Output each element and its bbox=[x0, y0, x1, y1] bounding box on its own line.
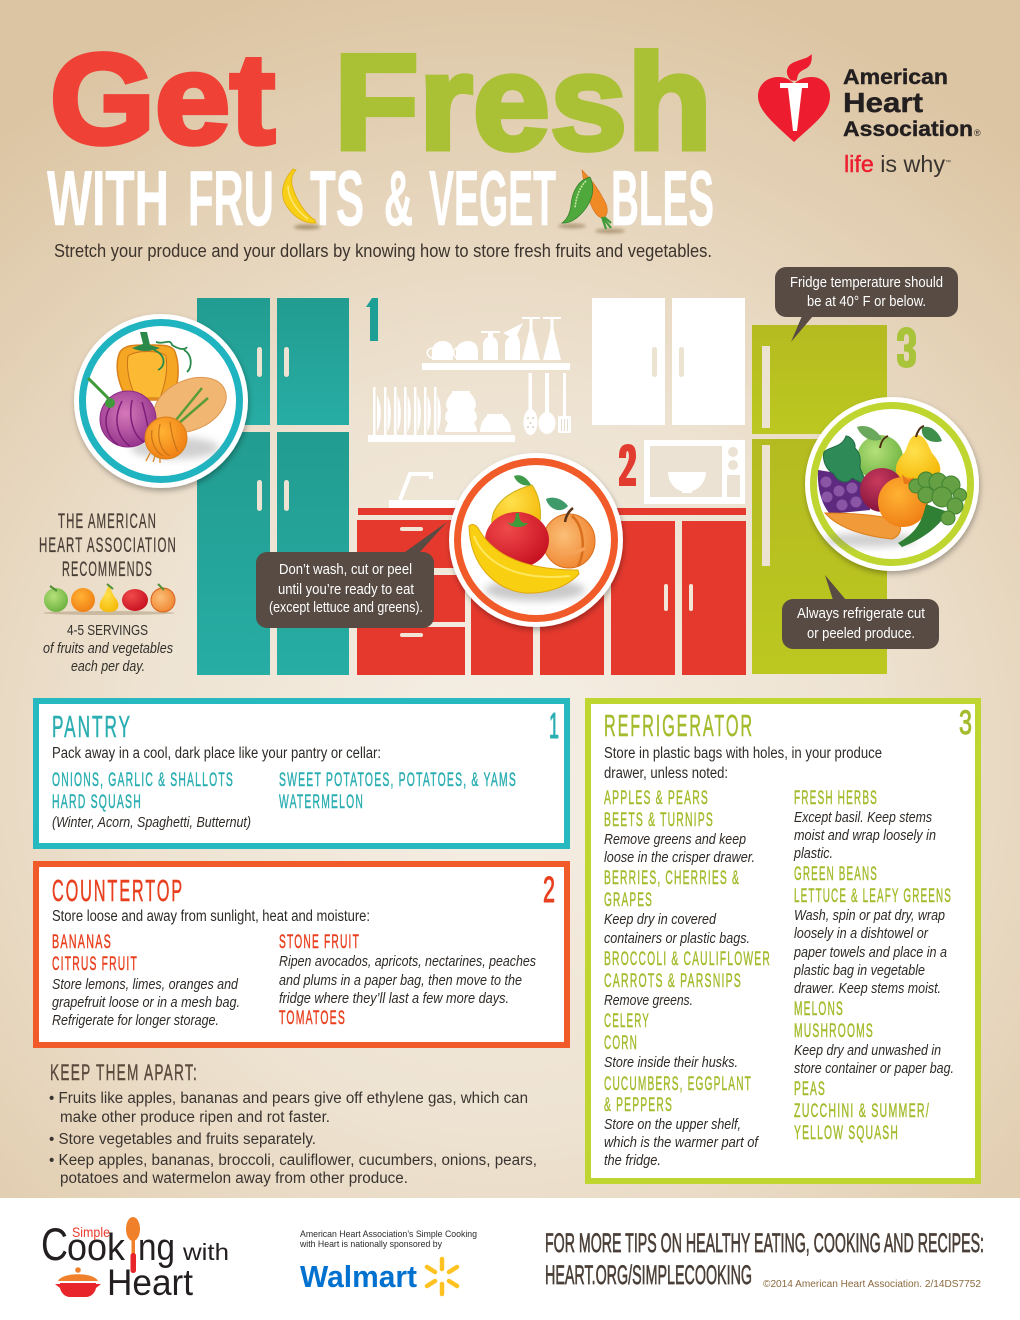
green apple bbox=[857, 426, 903, 481]
microwave bbox=[644, 440, 745, 504]
bullet list: potatoes and watermelon away from other produce. bbox=[60, 1170, 408, 1187]
icon: spark bbox=[427, 1259, 457, 1294]
right column bbox=[793, 788, 954, 1144]
text bbox=[604, 745, 882, 782]
leafy greens bbox=[823, 436, 868, 486]
right column: plastic bag in vegetable bbox=[793, 963, 925, 979]
yellow onion bbox=[145, 388, 208, 463]
right column: fridge where they’ll last a few more days. bbox=[279, 991, 509, 1007]
number 3 bbox=[897, 327, 916, 368]
produce list: SWEET POTATOES, POTATOES, & YAMS bbox=[279, 770, 517, 791]
left column: grapefruit loose or in a mesh bag. bbox=[52, 995, 240, 1011]
hanging utensils bbox=[524, 373, 571, 435]
produce list: HARD SQUASH bbox=[52, 792, 142, 813]
pear bbox=[896, 426, 942, 481]
cups and glasses bbox=[427, 317, 561, 360]
right column: GREEN BEANS bbox=[794, 864, 878, 885]
produce list: WATERMELON bbox=[279, 792, 364, 813]
logo: Simple Cooking with Heart: ook bbox=[67, 1227, 126, 1269]
logo: Walmart: Walmart bbox=[300, 1259, 417, 1294]
right column: TOMATOES bbox=[279, 1008, 346, 1029]
left column: Remove greens. bbox=[604, 993, 693, 1009]
logo: Simple Cooking with Heart: with bbox=[182, 1239, 229, 1265]
left column: BEETS & TURNIPS bbox=[604, 810, 714, 831]
left column: containers or plastic bags. bbox=[604, 931, 750, 947]
callout: wash bbox=[256, 522, 447, 628]
left column: CELERY bbox=[604, 1011, 650, 1032]
broccoli bbox=[898, 472, 966, 547]
right column: plastic. bbox=[793, 846, 833, 862]
icon: heart and torch bbox=[758, 53, 830, 142]
subtitle: with fruits and vegetables: TS bbox=[310, 154, 364, 242]
sink and faucet bbox=[389, 474, 460, 508]
right column: Keep dry and unwashed in bbox=[794, 1043, 941, 1059]
logo: American Heart Association: ™ bbox=[945, 159, 951, 166]
heading: REFRIGERATOR bbox=[604, 708, 754, 743]
number 2 bbox=[619, 444, 636, 486]
icon: banana bbox=[283, 169, 320, 230]
heading: PANTRY bbox=[52, 709, 132, 744]
subtitle: with fruits and vegetables: WITH bbox=[47, 154, 169, 242]
left column: CUCUMBERS, EGGPLANT bbox=[604, 1074, 752, 1095]
left column: Keep dry in covered bbox=[604, 912, 717, 928]
upper cabinets bbox=[592, 298, 745, 425]
right column bbox=[279, 932, 536, 1029]
number 1 bbox=[366, 298, 378, 341]
callout: fridge temperature bbox=[775, 267, 958, 342]
bullet list: • Store vegetables and fruits separately. bbox=[49, 1131, 316, 1148]
left column: GRAPES bbox=[604, 890, 653, 911]
logo: Simple Cooking with Heart: C bbox=[41, 1219, 68, 1270]
servings text: 4-5 SERVINGS bbox=[67, 622, 148, 639]
panel: countertop bbox=[36, 864, 567, 1045]
left column: Remove greens and keep bbox=[604, 832, 746, 848]
circle: countertop produce bbox=[449, 453, 623, 627]
callout: wash: until you’re ready to eat bbox=[278, 581, 415, 598]
logo: American Heart Association bbox=[758, 53, 981, 177]
produce list bbox=[52, 770, 517, 813]
dish shelves bbox=[368, 317, 571, 442]
right column: FRESH HERBS bbox=[794, 788, 878, 809]
right column: Except basil. Keep stems bbox=[794, 810, 932, 826]
orange bbox=[878, 474, 928, 527]
subtitle: with fruits and vegetables bbox=[47, 154, 714, 242]
text: Pack away in a cool, dark place like your pantry or cellar: bbox=[52, 745, 381, 762]
call to action: HEART.ORG/SIMPLECOOKING bbox=[545, 1260, 752, 1290]
note: (Winter, Acorn, Spaghetti, Butternut) bbox=[52, 815, 251, 831]
sponsor note: with Heart is nationally sponsored by bbox=[299, 1239, 442, 1250]
panel: pantry bbox=[36, 701, 567, 846]
number: 2 bbox=[543, 869, 555, 910]
right column: Wash, spin or pat dry, wrap bbox=[794, 908, 945, 924]
pantry cabinet bbox=[197, 298, 349, 675]
servings text: of fruits and vegetables bbox=[43, 640, 173, 657]
heading: HEART ASSOCIATION bbox=[39, 534, 177, 557]
left column: Store on the upper shelf, bbox=[604, 1117, 741, 1133]
panel: pantry: 1 bbox=[549, 705, 559, 746]
peach bbox=[543, 498, 595, 568]
left column: loose in the crisper drawer. bbox=[604, 850, 755, 866]
logo: American Heart Association: American bbox=[843, 66, 948, 89]
callout: refrigerate cut produce: or peeled produce. bbox=[807, 625, 915, 642]
left column: Store inside their husks. bbox=[604, 1055, 738, 1071]
right column: PEAS bbox=[794, 1079, 826, 1100]
purple onion bbox=[88, 378, 156, 447]
subtitle: with fruits and vegetables: FRU bbox=[188, 154, 274, 242]
subtitle: with fruits and vegetables: VEGET bbox=[429, 154, 556, 242]
recommendation block bbox=[39, 510, 177, 675]
footer bbox=[0, 1198, 1020, 1320]
left column: CORN bbox=[604, 1033, 638, 1054]
icon: spoon bbox=[126, 1217, 140, 1273]
grapes bbox=[818, 470, 870, 514]
callout: fridge temperature: Fridge temperature should bbox=[790, 274, 943, 291]
right column: MUSHROOMS bbox=[794, 1021, 874, 1042]
banana bbox=[469, 525, 579, 593]
produce list: ONIONS, GARLIC & SHALLOTS bbox=[52, 770, 234, 791]
right column: MELONS bbox=[794, 999, 844, 1020]
heading: THE AMERICAN bbox=[58, 510, 157, 533]
sponsor note bbox=[299, 1229, 477, 1250]
lemon bbox=[492, 475, 540, 532]
countertop and lower cabinets bbox=[357, 508, 746, 675]
copyright: ©2014 American Heart Association. 2/14DS7752 bbox=[763, 1279, 981, 1290]
right column: moist and wrap loosely in bbox=[794, 828, 936, 844]
logo: American Heart Association: ® bbox=[974, 128, 981, 138]
call to action bbox=[545, 1228, 984, 1290]
left column: Refrigerate for longer storage. bbox=[52, 1013, 219, 1029]
callout: fridge temperature: be at 40° F or below. bbox=[807, 293, 926, 310]
panel: refrigerator bbox=[588, 701, 978, 1181]
icon row: five fruits bbox=[43, 584, 175, 615]
left column: CITRUS FRUIT bbox=[52, 954, 138, 975]
logo: Simple Cooking with Heart: Simple bbox=[72, 1224, 110, 1240]
plum bbox=[860, 468, 904, 512]
right column: paper towels and place in a bbox=[793, 945, 947, 961]
text: drawer, unless noted: bbox=[604, 765, 728, 782]
bullet list: • Fruits like apples, bananas and pears give off ethylene gas, which can bbox=[49, 1090, 528, 1107]
refrigerator bbox=[752, 325, 887, 674]
logo: Simple Cooking with Heart: ng bbox=[138, 1227, 175, 1269]
right column: STONE FRUIT bbox=[279, 932, 360, 953]
right column: YELLOW SQUASH bbox=[794, 1123, 899, 1144]
right column: Ripen avocados, apricots, nectarines, peaches bbox=[279, 954, 536, 970]
circle: refrigerator produce bbox=[805, 397, 979, 571]
left column: BERRIES, CHERRIES & bbox=[604, 868, 740, 889]
text: BLES bbox=[611, 154, 714, 242]
kitchen illustration bbox=[197, 298, 916, 675]
left column: the fridge. bbox=[604, 1153, 661, 1169]
carrot bbox=[825, 513, 901, 539]
right column: loosely in a dishtowel or bbox=[794, 926, 929, 942]
intro text: Stretch your produce and your dollars by knowing how to store fresh fruits and vegetables. bbox=[54, 240, 712, 261]
callout: refrigerate cut produce bbox=[782, 575, 939, 649]
logo: Simple Cooking with Heart bbox=[41, 1217, 229, 1303]
callout: wash: Don’t wash, cut or peel bbox=[279, 561, 412, 578]
logo: American Heart Association: life is why bbox=[844, 151, 946, 177]
bullet list: make other produce ripen and rot faster. bbox=[60, 1109, 330, 1126]
heading: COUNTERTOP bbox=[52, 873, 184, 908]
title: Get Fresh: Get bbox=[50, 28, 275, 171]
right column: and plums in a paper bag, then move to the bbox=[279, 973, 522, 989]
plate rack bbox=[368, 387, 515, 442]
heading: KEEP THEM APART: bbox=[50, 1060, 198, 1085]
servings text bbox=[43, 622, 173, 675]
servings text: each per day. bbox=[71, 658, 145, 675]
callout: refrigerate cut produce: Always refrigerate cut bbox=[797, 605, 926, 622]
logo: American Heart Association: Heart bbox=[843, 87, 923, 118]
text: Store in plastic bags with holes, in your produce bbox=[604, 745, 882, 762]
subtitle: with fruits and vegetables: & bbox=[384, 154, 413, 242]
left column: APPLES & PEARS bbox=[604, 788, 709, 809]
potato bbox=[145, 367, 235, 443]
right column: store container or paper bag. bbox=[794, 1061, 954, 1077]
heading bbox=[39, 510, 177, 581]
logo: American Heart Association: Association bbox=[843, 118, 973, 141]
left column: BROCCOLI & CAULIFLOWER bbox=[604, 949, 771, 970]
text: Store loose and away from sunlight, heat and moisture: bbox=[52, 908, 370, 925]
keep them apart bbox=[49, 1060, 537, 1187]
number: 3 bbox=[959, 704, 972, 742]
left column: CARROTS & PARSNIPS bbox=[604, 971, 742, 992]
left column: Store lemons, limes, oranges and bbox=[52, 977, 239, 993]
title: Get Fresh bbox=[50, 26, 712, 178]
logo: Simple Cooking with Heart: Heart bbox=[107, 1262, 194, 1303]
left column: which is the warmer part of bbox=[604, 1135, 760, 1151]
left column bbox=[604, 788, 771, 1169]
title: Get Fresh: Fresh bbox=[334, 26, 712, 178]
circle: pantry produce bbox=[74, 314, 248, 488]
callout: wash: (except lettuce and greens). bbox=[269, 599, 423, 616]
bullet list: • Keep apples, bananas, broccoli, cauliflower, cucumbers, onions, pears, bbox=[49, 1152, 537, 1169]
icon: pot bbox=[55, 1267, 101, 1297]
heading: RECOMMENDS bbox=[62, 558, 153, 581]
left column: & PEPPERS bbox=[604, 1095, 673, 1116]
left column bbox=[52, 932, 240, 1029]
sponsor note: American Heart Association’s Simple Cooking bbox=[300, 1229, 477, 1240]
tomato bbox=[485, 512, 549, 568]
left column: BANANAS bbox=[52, 932, 112, 953]
icon: pea pod and carrot bbox=[558, 170, 625, 234]
pepper bbox=[117, 332, 191, 400]
bullet list bbox=[49, 1090, 537, 1187]
right column: drawer. Keep stems moist. bbox=[794, 981, 941, 997]
